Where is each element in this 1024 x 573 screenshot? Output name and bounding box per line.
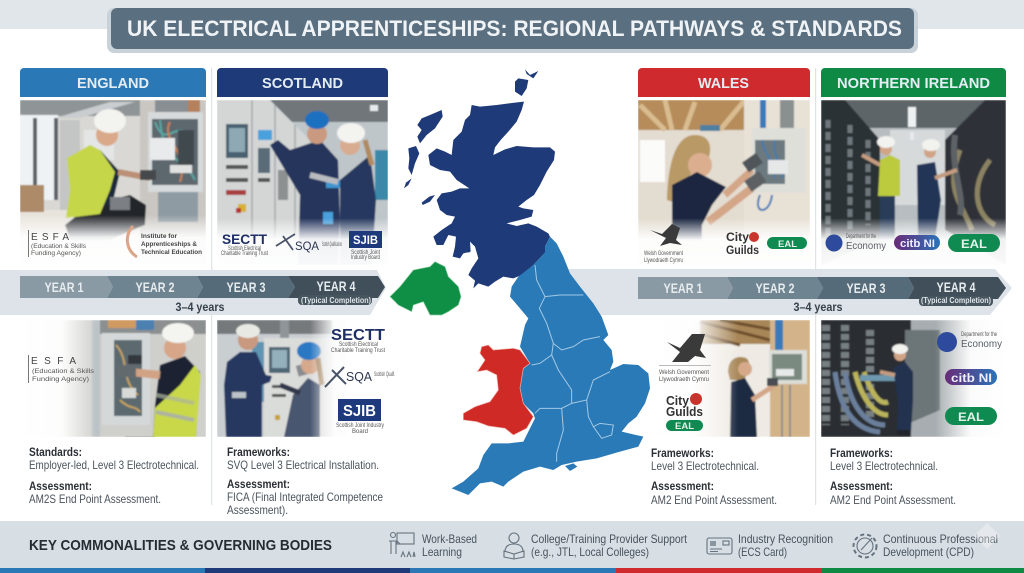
timeline band: right: 3–4 years <box>794 300 843 314</box>
England region <box>452 237 650 495</box>
work-based learning label: Learning <box>422 545 462 559</box>
Scotland header: SCOTLAND <box>262 75 343 92</box>
industry recognition label: Industry Recognition <box>738 532 833 546</box>
Northern Ireland top logos: EAL <box>961 237 987 251</box>
panel: Wales <box>638 68 810 507</box>
Scotland top logos: Scottish Qualifications <box>322 242 342 248</box>
industry recognition label: (ECS Card) <box>738 545 787 559</box>
panel: Scotland <box>217 68 395 517</box>
timeline band: right: YEAR 1 <box>664 280 703 296</box>
Northern Ireland lower logos <box>937 332 1003 425</box>
Northern Ireland frameworks text: Assessment: <box>830 479 893 493</box>
industry recognition label <box>738 532 833 559</box>
Northern Ireland top logos: Economy <box>846 241 886 252</box>
Scotland frameworks text <box>227 445 383 517</box>
panel: England <box>20 68 206 506</box>
England lower logo: ESFA: Funding Agency) <box>32 377 89 383</box>
title banner: UK ELECTRICAL APPRENTICESHIPS: REGIONAL PATHWAYS & STANDARDS <box>127 16 902 41</box>
timeline band: left: YEAR 4 <box>316 278 356 294</box>
Northern Ireland header: NORTHERN IRELAND <box>837 75 990 92</box>
Scotland top photo <box>217 100 388 265</box>
England header: ENGLAND <box>77 75 149 92</box>
Wales top logos: Guilds <box>726 243 759 257</box>
Scotland frameworks text: Assessment). <box>227 503 288 517</box>
England standards text: Standards: <box>29 445 82 459</box>
timeline band: left: YEAR 3 <box>226 279 266 295</box>
Wales header <box>638 68 810 97</box>
icon: college support <box>504 533 524 559</box>
Wales frameworks text: Frameworks: <box>651 446 714 460</box>
Northern Ireland frameworks text: AM2 End Point Assessment. <box>830 493 956 507</box>
England top logos: ESFA <box>31 232 69 243</box>
Northern Ireland top photo <box>821 100 1006 265</box>
England top logos <box>28 226 202 257</box>
Scotland frameworks text: Frameworks: <box>227 445 290 459</box>
timeline band: left: YEAR 2 <box>136 279 175 295</box>
Wales region <box>463 345 533 435</box>
footer colour stripe <box>0 568 1024 573</box>
college support label: College/Training Provider Support <box>531 532 688 546</box>
Wales top logos: Welsh Government <box>644 251 683 257</box>
Wales header: WALES <box>698 75 749 92</box>
Scotland top logos: Industry Board <box>351 255 380 261</box>
England header <box>20 68 206 97</box>
England top logos: Institute for <box>141 233 177 240</box>
timeline band: right: (Typical Completion) <box>921 296 991 305</box>
Wales lower logos <box>659 334 711 431</box>
Scotland lower logos: Scottish Qualif. <box>374 372 395 378</box>
Scotland lower logos: Scottish Joint Industry <box>336 423 384 429</box>
timeline band: right: YEAR 2 <box>756 280 795 296</box>
icon: ECS card <box>707 538 732 554</box>
timeline band: left: 3–4 years <box>176 300 225 314</box>
Northern Ireland top logos <box>826 234 1000 252</box>
Northern Ireland lower logos: Economy <box>961 338 1003 350</box>
Wales lower logos: City <box>666 393 690 408</box>
Scotland lower logos: SQA <box>346 370 373 384</box>
England top logos: (Education & Skills <box>31 244 86 250</box>
Scotland top logos: Scottish Electrical <box>228 246 261 252</box>
Scotland region <box>404 69 555 288</box>
Northern Ireland top logos: citb NI <box>900 238 935 250</box>
England lower logo: ESFA: (Education & Skills <box>32 369 94 375</box>
Scotland frameworks text: Assessment: <box>227 477 290 491</box>
Scotland lower logos: Scottish Electrical <box>339 342 378 348</box>
Scotland top logos: SQA <box>295 241 319 253</box>
Wales lower logos: EAL <box>675 421 695 431</box>
Scotland header <box>217 68 388 97</box>
Wales top logos: City <box>726 230 749 244</box>
Scotland top logos: SJIB <box>353 233 378 247</box>
timeline band: left: YEAR 1 <box>44 279 84 295</box>
college support label: (e.g., JTL, Local Colleges) <box>531 545 649 559</box>
England standards text: Employer-led, Level 3 Electrotechnical. <box>29 458 199 472</box>
Scotland frameworks text: FICA (Final Integrated Competence <box>227 490 383 504</box>
Northern Ireland frameworks text <box>830 446 956 507</box>
work-based learning label: Work-Based <box>422 532 477 546</box>
Northern Ireland header <box>821 68 1006 97</box>
panel: Northern Ireland <box>821 68 1006 507</box>
timeline band: left: (Typical Completion) <box>301 296 371 305</box>
England top logos: Funding Agency) <box>31 251 81 257</box>
England standards text <box>29 445 199 506</box>
Northern Ireland top logos: Department for the <box>846 234 876 240</box>
Scotland lower logos: SJIB <box>343 403 376 420</box>
England lower logo: ESFA: ESFA <box>31 356 76 367</box>
timeline band: right <box>565 269 1012 315</box>
Wales frameworks text: AM2 End Point Assessment. <box>651 493 777 507</box>
England top photo <box>20 100 206 240</box>
Wales lower photo <box>699 320 810 437</box>
Wales top logos <box>644 224 807 264</box>
Wales lower logos: Llywodraeth Cymru <box>659 377 709 383</box>
Wales frameworks text: Level 3 Electrotechnical. <box>651 459 759 473</box>
England lower photo <box>66 320 206 437</box>
Scotland lower logos <box>325 327 395 435</box>
footer: key commonalities <box>0 521 1024 568</box>
timeline band: right: YEAR 3 <box>846 280 886 296</box>
Scotland lower logos: SECTT <box>331 327 386 344</box>
Northern Ireland frameworks text: Level 3 Electrotechnical. <box>830 459 938 473</box>
Wales top logos: EAL <box>778 239 797 250</box>
title banner <box>107 8 918 53</box>
continuous development label <box>883 532 998 559</box>
Scotland lower logos: Board <box>352 429 368 435</box>
icon: gear <box>854 534 876 558</box>
Scotland top logos: Charitable Training Trust <box>221 251 268 257</box>
Wales lower logos: Guilds <box>666 404 703 419</box>
Wales frameworks text: Assessment: <box>651 479 714 493</box>
Scotland top logos <box>221 231 382 261</box>
Scotland top logos: Scottish Joint <box>351 250 380 256</box>
England lower logo: ESFA <box>28 355 94 383</box>
UK map <box>390 69 650 495</box>
Scotland top logos: SECTT <box>222 232 268 247</box>
timeline band: right: YEAR 4 <box>936 279 976 295</box>
work-based learning label <box>422 532 477 559</box>
college support label <box>531 532 688 559</box>
timeline band: left <box>0 270 386 315</box>
England top logos: Technical Education <box>141 249 202 256</box>
England standards text: Assessment: <box>29 479 92 493</box>
Wales top logos: Llywodraeth Cymru <box>644 258 683 264</box>
Scotland lower photo <box>217 320 333 437</box>
Northern Ireland lower logos: Department for the <box>961 332 997 338</box>
Northern Ireland lower logos: citb NI <box>951 371 992 385</box>
icon: work-based learning <box>389 532 415 557</box>
Scotland lower logos: Charitable Training Trust <box>331 348 385 354</box>
England standards text: AM2S End Point Assessment. <box>29 492 161 506</box>
Northern Ireland frameworks text: Frameworks: <box>830 446 893 460</box>
continuous development label: Development (CPD) <box>883 545 974 559</box>
England top logos: Apprenticeships & <box>141 241 197 248</box>
Northern Ireland lower photo <box>821 320 969 437</box>
Wales frameworks text <box>651 446 777 507</box>
Northern Ireland lower logos: EAL <box>958 410 984 424</box>
footer heading: KEY COMMONALITIES & GOVERNING BODIES <box>29 537 332 554</box>
Wales lower logos: Welsh Government <box>659 370 709 376</box>
Northern Ireland region <box>390 262 461 315</box>
continuous development label: Continuous Professional <box>883 532 998 546</box>
Scotland frameworks text: SVQ Level 3 Electrical Installation. <box>227 458 379 472</box>
Wales top photo <box>638 100 810 240</box>
